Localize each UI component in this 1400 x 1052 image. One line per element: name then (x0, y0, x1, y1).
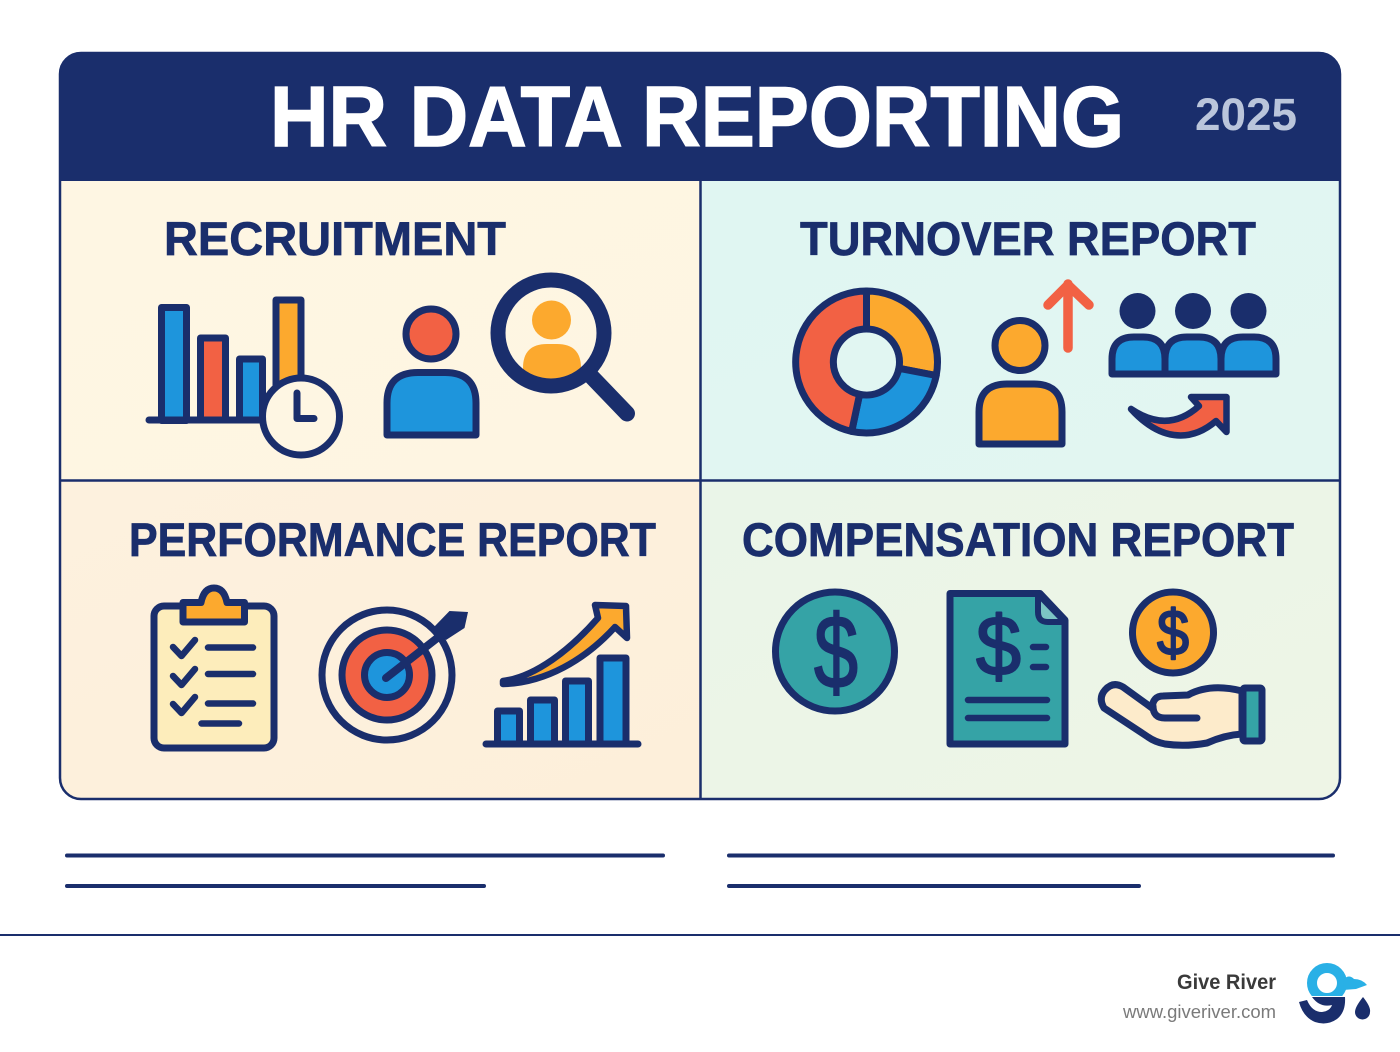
icon: curved arrow (1131, 397, 1226, 435)
panel: recruitment (60, 181, 700, 480)
icon: clipboard checklist (154, 588, 274, 748)
icon: dollar coin: $ (814, 595, 858, 711)
icon: team (1112, 293, 1276, 374)
icon: up arrow (1048, 284, 1089, 348)
icon: Give River logo (1299, 968, 1370, 1023)
icon: payroll document (950, 594, 1065, 744)
icon: payroll document: $ (976, 599, 1021, 693)
icon: person (979, 320, 1062, 444)
panel: performance report (60, 481, 700, 799)
heading: turnover report: TURNOVER REPORT (800, 212, 1256, 265)
icon: dollar coin (776, 592, 894, 711)
heading: performance report: PERFORMANCE REPORT (129, 513, 656, 566)
icon: growth chart (486, 605, 638, 744)
icon: magnifier with candidate (498, 280, 627, 414)
panel: compensation report (700, 481, 1340, 799)
icon: bar chart with clock (149, 300, 340, 455)
icon: donut chart (796, 291, 937, 433)
card grid and border (60, 53, 1340, 799)
icon: hand with coin: $ (1157, 597, 1189, 669)
icon: target with arrow (322, 610, 468, 740)
icon: hand with coin (1101, 592, 1262, 745)
icon: person (387, 309, 476, 435)
footer website: www.giveriver.com (1122, 1002, 1276, 1022)
header band (60, 53, 1340, 181)
heading: recruitment: RECRUITMENT (164, 212, 506, 265)
placeholder text lines (67, 856, 1333, 886)
heading: compensation report: COMPENSATION REPORT (742, 513, 1294, 566)
footer brand name: Give River (1177, 971, 1276, 994)
panel: turnover report (700, 181, 1340, 480)
year: 2025 (1195, 89, 1297, 140)
title: HR DATA REPORTING (270, 70, 1124, 165)
